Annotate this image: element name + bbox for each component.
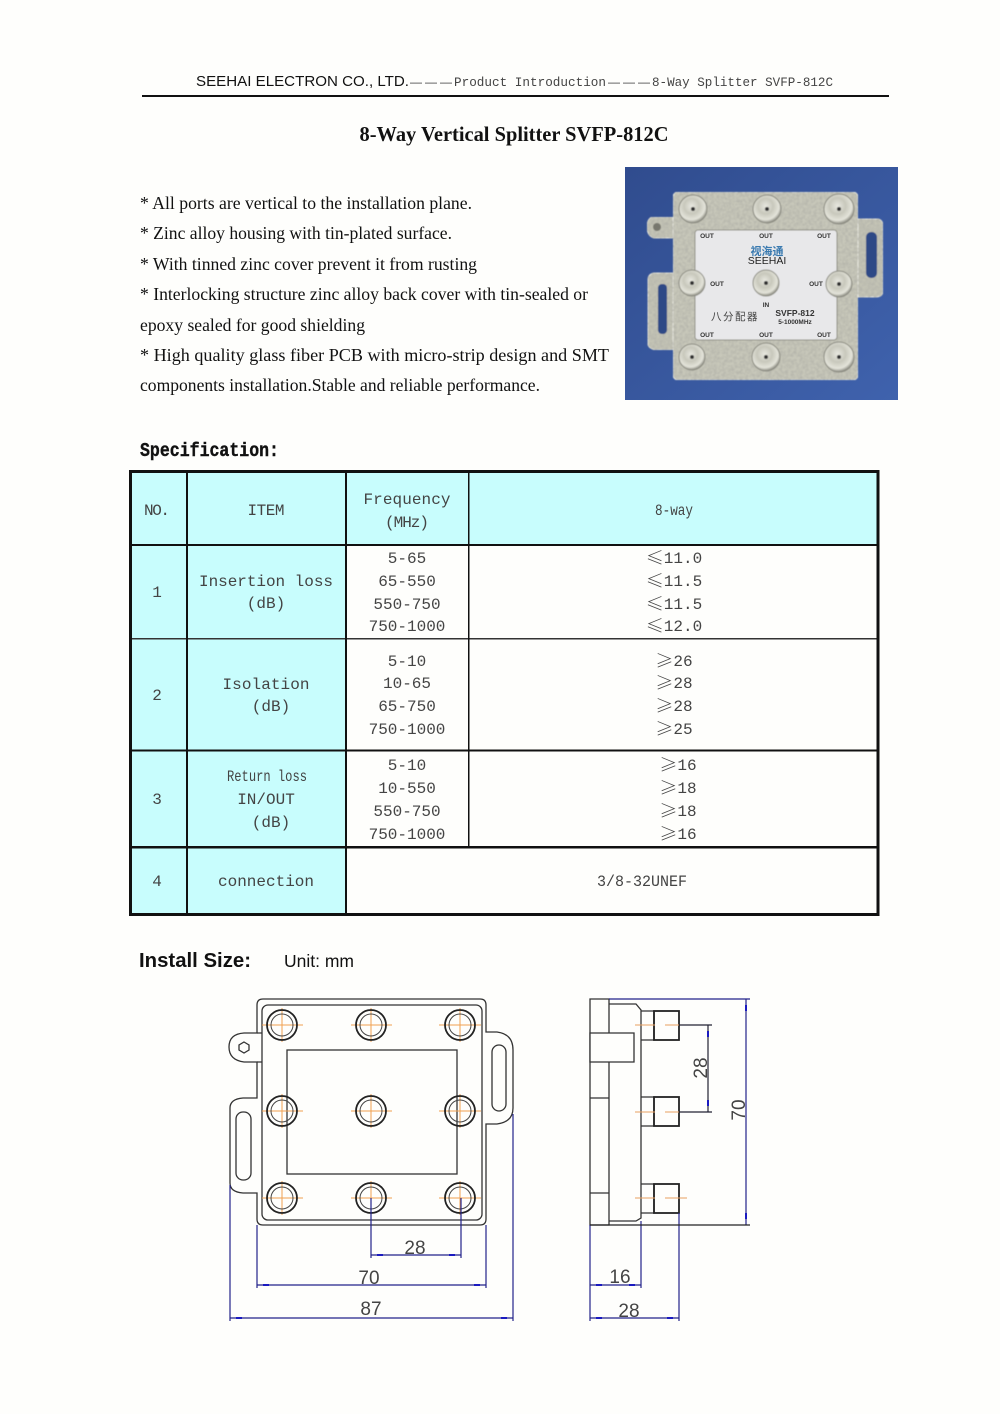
feature list: * Zinc alloy housing with tin-plated surface. xyxy=(140,223,452,243)
row 2 isolation: 10-65 xyxy=(383,675,431,693)
row 3 return loss: 16 xyxy=(677,826,697,844)
feature list: epoxy sealed for good shielding xyxy=(140,315,365,335)
row 2 isolation: 65-750 xyxy=(378,698,436,716)
row 4 connection xyxy=(152,873,687,891)
row 2 isolation: 750-1000 xyxy=(369,721,445,739)
table header row: ITEM xyxy=(248,502,284,520)
row 1 insertion loss xyxy=(152,544,702,638)
row 3 return loss: 18 xyxy=(677,780,697,798)
row 3 return loss: 3 xyxy=(152,791,162,809)
row 1 insertion loss: 12.0 xyxy=(664,618,702,636)
connector ports xyxy=(262,1008,481,1215)
row 2 isolation: ≥ xyxy=(655,692,673,718)
front view dimensions: 28 xyxy=(404,1238,426,1259)
row 1 insertion loss: ≤ xyxy=(646,568,664,594)
row 2 isolation: (dB) xyxy=(252,698,290,716)
row 2 isolation: ≥ xyxy=(655,648,673,674)
product photo: OUT xyxy=(700,332,714,339)
page header: ——— xyxy=(608,75,650,89)
product photo: OUT xyxy=(809,281,823,288)
row 1 insertion loss: Insertion loss xyxy=(199,573,333,591)
row 2 isolation: ≥ xyxy=(655,716,673,742)
product photo: SVFP-812 xyxy=(775,308,815,318)
feature list: * All ports are vertical to the installation plane. xyxy=(140,193,472,213)
row 2 isolation xyxy=(152,648,693,742)
row 2 isolation: 2 xyxy=(152,687,162,705)
side view dimensions: 28 xyxy=(618,1301,640,1322)
table header row: Frequency xyxy=(364,491,451,509)
row 4 connection: 3/8-32UNEF xyxy=(597,873,687,891)
side view dimensions xyxy=(590,999,750,1322)
table header row xyxy=(144,491,693,532)
row 1 insertion loss: 1 xyxy=(152,584,162,602)
row 3 return loss: ≥ xyxy=(659,798,677,824)
product photo: 八分配器 xyxy=(711,311,759,323)
row 2 isolation: 28 xyxy=(673,675,693,693)
row 3 return loss: ≥ xyxy=(659,820,677,846)
install size heading: Unit: mm xyxy=(284,951,354,971)
page header: SEEHAI ELECTRON CO., LTD. xyxy=(196,74,409,90)
page header: Product Introduction xyxy=(454,75,606,90)
side view dimensions: 16 xyxy=(609,1267,631,1288)
specification heading: Specification: xyxy=(140,440,279,462)
row 2 isolation: Isolation xyxy=(222,676,310,694)
row 4 connection: connection xyxy=(218,873,314,891)
product photo: OUT xyxy=(710,281,724,288)
row 3 return loss xyxy=(152,752,697,846)
row 1 insertion loss: 550-750 xyxy=(373,596,441,614)
row 3 return loss: ≥ xyxy=(659,752,677,778)
row 1 insertion loss: 11.0 xyxy=(664,550,702,568)
side view dimensions: 28 xyxy=(691,1057,712,1079)
row 3 return loss: (dB) xyxy=(252,814,290,832)
feature list: * With tinned zinc cover prevent it from rusting xyxy=(140,254,477,274)
product photo xyxy=(625,167,898,400)
product photo: OUT xyxy=(817,233,831,240)
row 3 return loss: 750-1000 xyxy=(369,826,445,844)
front view dimensions: 70 xyxy=(358,1268,380,1289)
row 3 return loss: ≥ xyxy=(659,774,677,800)
front view drawing xyxy=(229,999,513,1321)
row 3 return loss: 18 xyxy=(677,803,697,821)
feature list xyxy=(140,193,609,395)
product photo: 5-1000MHz xyxy=(778,319,813,326)
feature list: components installation.Stable and reliable performance. xyxy=(140,375,540,395)
row 2 isolation: 25 xyxy=(673,721,693,739)
row 1 insertion loss: ≤ xyxy=(646,544,664,570)
side connectors xyxy=(635,1011,687,1213)
product photo: 视海通 xyxy=(750,244,784,258)
product photo: IN xyxy=(763,302,770,309)
product photo: OUT xyxy=(700,233,714,240)
row 1 insertion loss: 750-1000 xyxy=(369,618,445,636)
table cyan cells xyxy=(130,471,878,914)
row 1 insertion loss: ≤ xyxy=(646,612,664,638)
row 1 insertion loss: 5-65 xyxy=(388,550,426,568)
row 1 insertion loss: ≤ xyxy=(646,590,664,616)
feature list: * Interlocking structure zinc alloy back cover with tin-sealed or xyxy=(140,284,588,304)
product photo: OUT xyxy=(759,332,773,339)
side view dimensions: 70 xyxy=(729,1099,750,1121)
row 1 insertion loss: 65-550 xyxy=(378,573,436,591)
row 1 insertion loss: (dB) xyxy=(247,595,285,613)
table header row: (MHz) xyxy=(385,514,429,532)
page header: 8-Way Splitter SVFP-812C xyxy=(652,75,833,90)
product photo: OUT xyxy=(759,233,773,240)
row 3 return loss: 5-10 xyxy=(388,757,426,775)
row 1 insertion loss: 11.5 xyxy=(664,596,702,614)
front view dimensions: 87 xyxy=(360,1299,382,1320)
title: 8-Way Vertical Splitter SVFP-812C xyxy=(360,122,668,146)
row 2 isolation: 28 xyxy=(673,698,693,716)
page header: ——— xyxy=(410,75,452,89)
row 2 isolation: ≥ xyxy=(655,670,673,696)
row 3 return loss: 10-550 xyxy=(378,780,436,798)
row 3 return loss: 16 xyxy=(677,757,697,775)
row 1 insertion loss: 11.5 xyxy=(664,573,702,591)
specification table xyxy=(130,471,878,914)
table header row: NO. xyxy=(144,502,170,520)
side view drawing xyxy=(590,999,750,1322)
install size heading: Install Size: xyxy=(139,950,251,972)
row 4 connection: 4 xyxy=(152,873,162,891)
page header xyxy=(142,74,889,97)
install size heading xyxy=(139,950,354,972)
row 2 isolation: 26 xyxy=(673,653,693,671)
product photo: OUT xyxy=(817,332,831,339)
product photo: SEEHAI xyxy=(748,255,786,267)
row 2 isolation: 5-10 xyxy=(388,653,426,671)
front view dimensions xyxy=(230,1114,513,1321)
row 3 return loss: Return loss xyxy=(227,768,307,786)
row 3 return loss: IN/OUT xyxy=(237,791,295,809)
feature list: * High quality glass fiber PCB with micro-strip design and SMT xyxy=(140,345,609,365)
row 3 return loss: 550-750 xyxy=(373,803,441,821)
table header row: 8-way xyxy=(655,502,693,520)
